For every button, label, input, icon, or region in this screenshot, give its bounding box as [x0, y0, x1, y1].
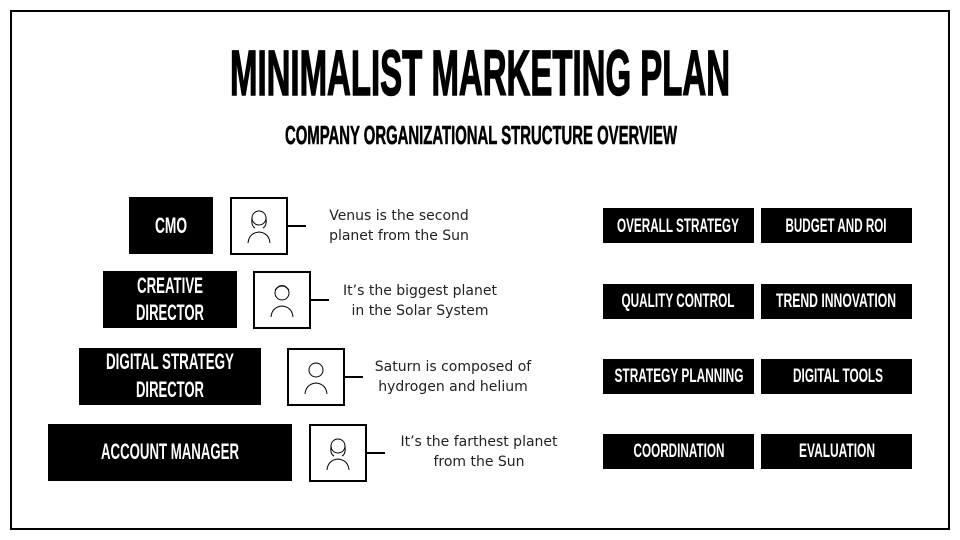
- description: Account Manager: [400, 434, 558, 470]
- role box: Account Manager: ACCOUNT MANAGER: [101, 439, 239, 464]
- description: CMO: planet from the Sun: [329, 228, 469, 244]
- row: Creative Director: [103, 271, 497, 328]
- responsibility tags: [603, 208, 912, 469]
- tag: Overall Strategy: OVERALL STRATEGY: [617, 216, 739, 237]
- role box: Creative Director: CREATIVE: [137, 273, 203, 298]
- description: Account Manager: It’s the farthest planet: [400, 434, 558, 450]
- icon: woman avatar: [310, 425, 366, 481]
- tag: Digital Tools: DIGITAL TOOLS: [793, 366, 883, 387]
- role box: Digital Strategy Director: DIRECTOR: [136, 377, 204, 402]
- description: CMO: Venus is the second: [329, 208, 469, 224]
- role box: Account Manager: [48, 424, 292, 481]
- description: Creative Director: It’s the biggest planet: [343, 283, 497, 299]
- tag: Overall Strategy: [603, 208, 754, 243]
- tag: Evaluation: EVALUATION: [799, 441, 875, 462]
- subtitle: COMPANY ORGANIZATIONAL STRUCTURE OVERVIEW: [285, 120, 677, 150]
- tag: Budget and ROI: BUDGET AND ROI: [786, 216, 886, 237]
- role box: Creative Director: DIRECTOR: [136, 300, 204, 325]
- role box: CMO: CMO: [155, 213, 187, 238]
- role box: Creative Director: [103, 271, 237, 328]
- tag: Digital Tools: [761, 359, 912, 394]
- row: Digital Strategy Director: [79, 348, 532, 405]
- description: Creative Director: [343, 283, 497, 319]
- row: Account Manager: [48, 424, 558, 481]
- icon: woman avatar: [231, 198, 287, 254]
- icon: person avatar: [288, 349, 344, 405]
- role box: CMO: [129, 197, 213, 254]
- tag: Trend Innovation: TREND INNOVATION: [776, 291, 896, 312]
- tag: Trend Innovation: [761, 284, 912, 319]
- tag: Quality Control: [603, 284, 754, 319]
- tag: Quality Control: QUALITY CONTROL: [622, 291, 735, 312]
- description: CMO: [329, 208, 469, 244]
- tag: Coordination: [603, 434, 754, 469]
- description: Creative Director: in the Solar System: [352, 303, 488, 319]
- description: Account Manager: from the Sun: [433, 454, 525, 470]
- tag: Evaluation: [761, 434, 912, 469]
- tag: Strategy Planning: [603, 359, 754, 394]
- tag: Budget and ROI: [761, 208, 912, 243]
- row: CMO: [129, 197, 469, 254]
- tag: Strategy Planning: STRATEGY PLANNING: [614, 366, 744, 387]
- role box: Digital Strategy Director: [79, 348, 261, 405]
- description: Digital Strategy Director: [375, 359, 532, 395]
- tag: Coordination: COORDINATION: [634, 441, 724, 462]
- role box: Digital Strategy Director: DIGITAL STRATEGY: [106, 349, 234, 374]
- description: Digital Strategy Director: Saturn is composed of: [375, 359, 532, 375]
- icon: man avatar: [254, 272, 310, 328]
- description: Digital Strategy Director: hydrogen and helium: [378, 379, 528, 395]
